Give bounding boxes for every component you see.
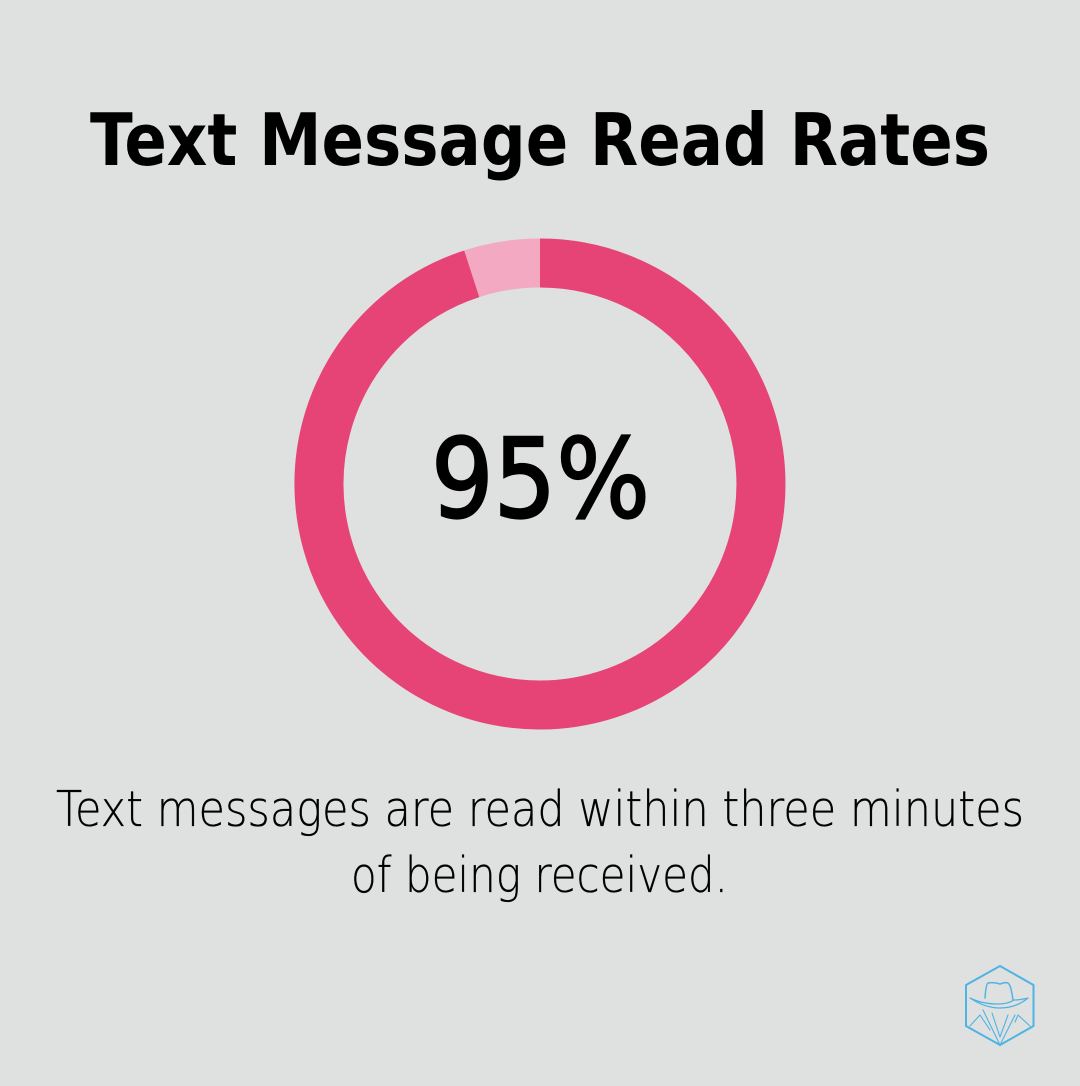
coat collar (970, 1010, 1030, 1045)
donut value: 95% arc (319, 263, 761, 705)
icon: hexagon spy logo (966, 966, 1034, 1045)
donut centre value: 95% (431, 415, 650, 543)
hat brim (970, 998, 1028, 1008)
hexagon outline (966, 966, 1034, 1045)
caption text: of being received. (351, 847, 728, 904)
donut chart: 95% (319, 263, 761, 705)
caption text (56, 781, 1024, 904)
donut track: remaining 5% (319, 263, 761, 705)
hat crown (985, 983, 1013, 1000)
